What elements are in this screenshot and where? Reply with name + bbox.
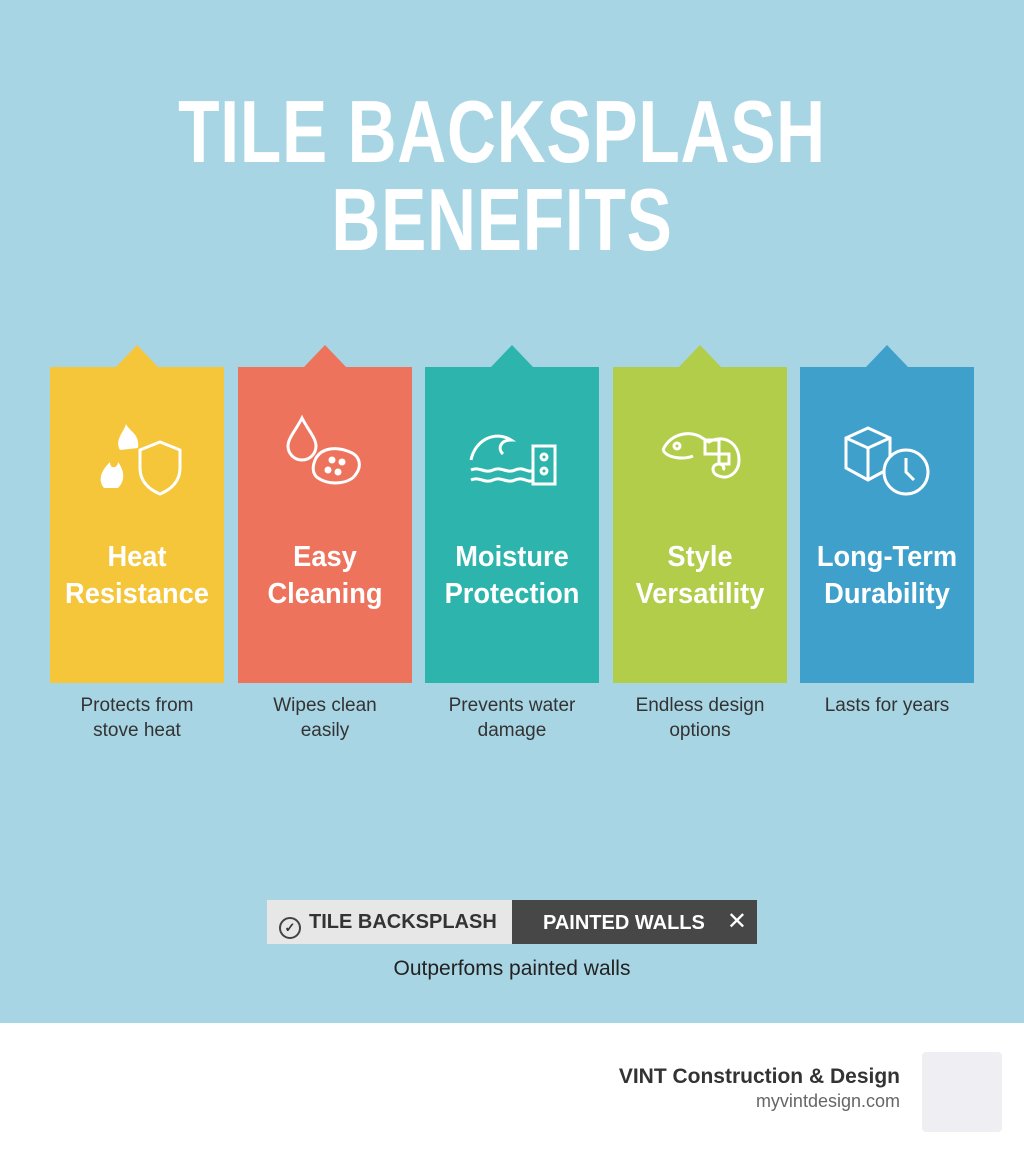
panel: heat resistance: Heat [107,541,167,573]
footer brand: VINT Construction & Design [619,1065,900,1088]
panel: style versatility [613,345,787,683]
panel: style versatility: Style [667,541,733,573]
tag: painted walls [512,900,757,944]
tag: tile backsplash [267,900,512,944]
panel: long-term durability: Durability [824,578,950,610]
text: moisture description [449,695,575,741]
text: heat description [80,695,193,741]
text: moisture description: Prevents water [449,695,575,716]
panel: long-term durability: Long-Term [817,541,957,573]
footer brand: myvintdesign.com [756,1091,900,1111]
tag: tile backsplash: TILE BACKSPLASH [309,911,497,933]
icon: wave and tile [470,434,556,486]
text: moisture description: damage [478,720,546,741]
tag: painted walls: PAINTED WALLS ✕ [543,908,747,935]
text: style description: Endless design [636,695,764,716]
panel: moisture protection [425,345,599,683]
logo box [922,1052,1002,1132]
tag: tile backsplash: ✓ [285,920,295,935]
text: cleaning description [273,695,377,741]
panel: style versatility: Versatility [636,578,764,610]
panel: moisture protection: Protection [445,578,579,610]
text: outperforms: Outperfoms painted walls [394,957,630,980]
text: cleaning description: easily [301,720,349,741]
title: BENEFITS [331,170,673,269]
panel: long-term durability [800,345,974,683]
title: TILE BACKSPLASH [178,82,826,181]
panel: easy cleaning: Easy [293,541,357,573]
panel: easy cleaning [238,345,412,683]
panel: easy cleaning: Cleaning [267,578,383,610]
panel: heat resistance [50,345,224,683]
text: cleaning description: Wipes clean [273,695,377,716]
comparison bar [267,900,757,944]
text: durability description: Lasts for years [825,695,949,716]
icon: flames shield [100,424,182,496]
text: style description: options [669,720,731,741]
footer brand [619,1065,900,1111]
icon: chameleon [662,432,740,479]
text: heat description: stove heat [93,720,181,741]
text: heat description: Protects from [80,695,193,716]
panel: moisture protection: Moisture [455,541,569,573]
panel: heat resistance: Resistance [65,578,209,610]
title [178,82,826,269]
icon: cube and clock [844,426,930,496]
icon: drop and sponge [286,414,361,484]
text: style description [636,695,764,741]
